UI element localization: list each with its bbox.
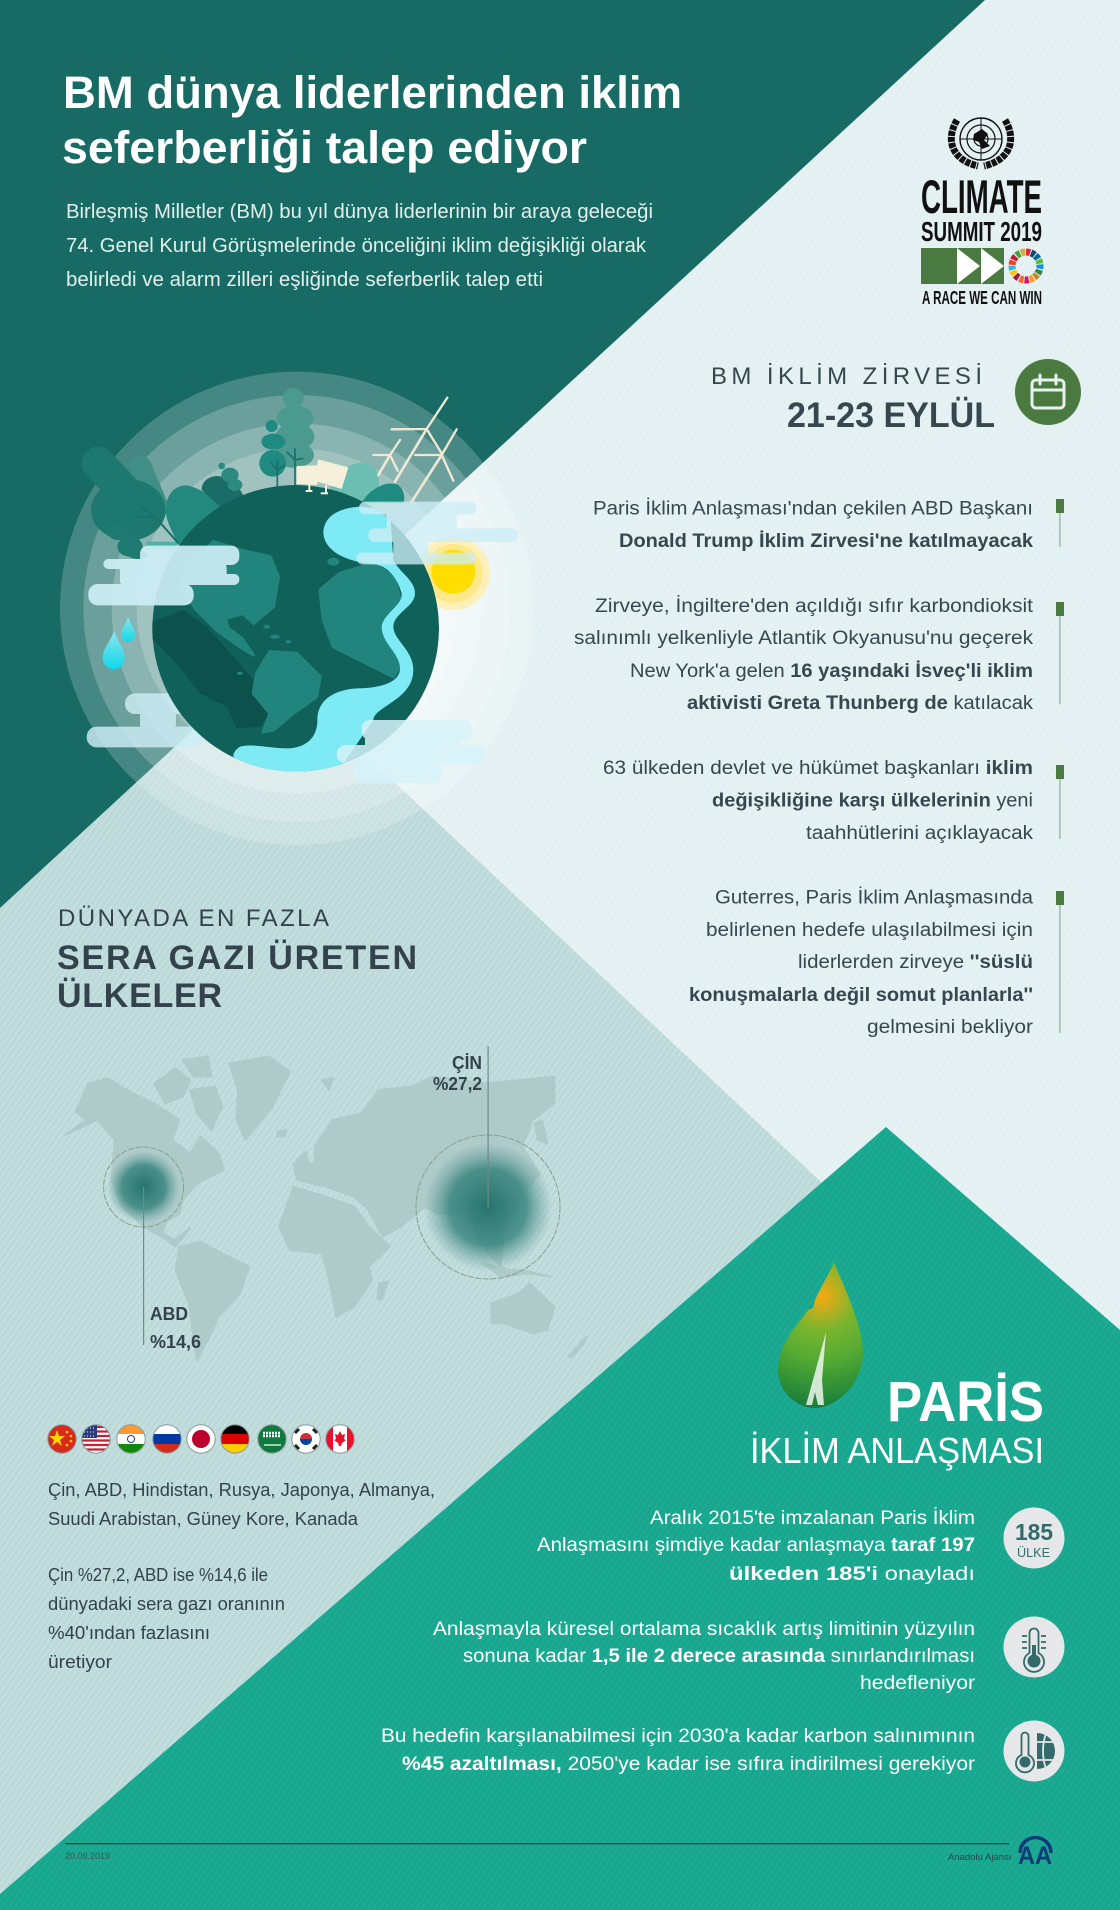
pale right hill (330, 463, 379, 507)
icon: solar panels (297, 459, 348, 494)
bottom right cloud (337, 720, 485, 783)
icon: wind turbines (373, 398, 457, 502)
country list text (48, 1480, 435, 1529)
share text: Çin %27,2, ABD ise %14,6 ile (48, 1565, 268, 1585)
text block: 185 countries (537, 1508, 975, 1585)
heading: date: 21-23 EYLÜL (787, 396, 995, 435)
icon: SDG colour wheel (1006, 246, 1046, 286)
small islands (237, 558, 339, 675)
grey-green map panel (0, 662, 900, 1910)
flag: Russia (152, 1424, 182, 1454)
text block: Guterres: Guterres, Paris İklim Anlaşmasında (715, 888, 1033, 908)
icon: rain drop small (121, 617, 135, 642)
world map (65, 1057, 586, 1360)
text block: temperature limit: hedefleniyor (860, 1673, 976, 1694)
dark ocean shape (152, 610, 268, 728)
heading: greenhouse gas countries: DÜNYADA EN FAZLA (58, 905, 329, 932)
icon: calendar (1015, 359, 1081, 425)
text block: Greta Thunberg: salınımlı yelkenliyle Atlantik Okyanusu'nu geçerek (574, 628, 1034, 649)
text block: temperature limit: Anlaşmayla küresel ortalama sıcaklık artış limitinin yüzyılın (433, 1619, 975, 1640)
title: seferberliği talep ediyor (62, 122, 587, 173)
intro paragraph (66, 201, 653, 291)
text block: Guterres: liderlerden zirveye ''süslü (798, 952, 1033, 973)
text block: Trump (593, 498, 1033, 552)
continent: Africa and Europe (320, 563, 403, 677)
text block: 185 countries: Anlaşmasını şimdiye kadar anlaşmaya taraf 197 (537, 1535, 975, 1556)
title: BM dünya liderlerinden iklim (63, 67, 682, 118)
intro paragraph: belirledi ve alarm zilleri eşliğinde seferberlik talep etti (66, 269, 543, 291)
flag: Japan (187, 1425, 215, 1453)
continent: South America (253, 652, 320, 732)
marker line 2 (1056, 602, 1064, 704)
text block: Guterres: konuşmalarla değil somut planlarla'' (689, 985, 1033, 1006)
hotspot: USA (104, 1147, 184, 1345)
text block: Trump: Paris İklim Anlaşması'ndan çekilen ABD Başkanı (593, 498, 1033, 520)
text block: temperature limit: sonuna kadar 1,5 ile 2 derece arasında sınırlandırılması (463, 1646, 975, 1667)
halo rings (60, 372, 533, 845)
icon: thermometer and globe (1004, 1720, 1064, 1782)
dark hill on horizon (362, 484, 404, 503)
marker line 4 (1056, 891, 1064, 1033)
title (62, 67, 682, 173)
share text (48, 1565, 285, 1672)
large left tree, pale (128, 456, 157, 507)
text block: 63 countries (603, 758, 1034, 844)
heading: greenhouse gas countries: ÜLKELER (57, 977, 222, 1015)
left cloud (88, 546, 239, 605)
icon: thermometer (1004, 1616, 1064, 1678)
footer date: 20.09.2019 (65, 1851, 110, 1861)
hill wedge (147, 542, 180, 550)
icon: 185 ülke: 185 (1015, 1519, 1053, 1545)
text block: Greta Thunberg (574, 596, 1034, 714)
text block: Greta Thunberg: Zirveye, İngiltere'den açıldığı sıfır karbondioksit (595, 596, 1034, 617)
share text: %40'ından fazlasını (48, 1623, 210, 1643)
text block: Guterres: gelmesini bekliyor (867, 1017, 1034, 1038)
top right cloud (357, 502, 518, 564)
label: USA (150, 1304, 201, 1352)
small tree (218, 463, 242, 491)
heading: greenhouse gas countries: SERA GAZI ÜRETEN (57, 939, 417, 977)
flag: South Korea (292, 1425, 320, 1453)
teal Paris panel (0, 1127, 1120, 1910)
logo green bar with arrows (921, 248, 1004, 284)
text block: 63 countries: taahhütlerini açıklayacak (806, 823, 1034, 844)
marker line 3 (1056, 765, 1064, 839)
text block: 185 countries: Aralık 2015'te imzalanan Paris İklim (650, 1508, 975, 1529)
icon: rain drop large (103, 631, 125, 669)
trunks (270, 448, 303, 493)
text block: carbon target: %45 azaltılması, 2050'ye kadar ise sıfıra indirilmesi gerekiyor (402, 1754, 976, 1775)
logo: Climate Summit 2019 (921, 118, 1046, 308)
country list text: Suudi Arabistan, Güney Kore, Kanada (48, 1509, 359, 1529)
country list text: Çin, ABD, Hindistan, Rusya, Japonya, Almanya, (48, 1480, 435, 1500)
flag: Germany (220, 1424, 250, 1454)
share text: dünyadaki sera gazı oranının (48, 1594, 285, 1614)
text block: Greta Thunberg: New York'a gelen 16 yaşındaki İsveç'li iklim (630, 661, 1033, 682)
dark back dome (202, 476, 243, 507)
flag: India (116, 1424, 146, 1454)
tall pale tree (274, 388, 314, 468)
text block: Trump: Donald Trump İklim Zirvesi'ne katılmayacak (619, 531, 1033, 552)
label: China: %27,2 (433, 1074, 482, 1094)
river (233, 507, 415, 775)
dark pine tree (259, 420, 286, 477)
icon: sun (417, 537, 490, 610)
icon: 185 ülke (1004, 1508, 1064, 1568)
text block: 63 countries: değişikliğine karşı ülkelerinin yeni (712, 790, 1033, 812)
intro paragraph: 74. Genel Kurul Görüşmelerinde önceliğini iklim değişikliği olarak (66, 235, 647, 257)
flags row (47, 1424, 355, 1454)
label: USA: %14,6 (150, 1332, 201, 1352)
flag: China (47, 1424, 77, 1454)
text block: 185 countries: ülkeden 185'i onayladı (729, 1564, 975, 1585)
continent: North America (180, 542, 278, 655)
lower left cloud (87, 693, 203, 747)
text block: Greta Thunberg: aktivisti Greta Thunberg de katılacak (687, 693, 1034, 714)
large left tree, dark (91, 463, 166, 541)
share text: üretiyor (48, 1652, 112, 1672)
footer source: Anadolu Ajansı (948, 1852, 1011, 1863)
branch (137, 507, 178, 543)
label: China (433, 1053, 482, 1094)
marker line 1 (1056, 499, 1064, 547)
globe body (140, 485, 439, 775)
flag: Saudi Arabia (258, 1425, 286, 1453)
teal stripe texture (0, 1127, 1120, 1910)
globe illustration (60, 372, 533, 845)
label: China: ÇİN (452, 1053, 482, 1073)
icon: AA logo: AA (1018, 1842, 1052, 1870)
text block: carbon target: Bu hedefin karşılanabilmesi için 2030'a kadar karbon salınımının (381, 1726, 975, 1747)
text block: carbon target (381, 1726, 976, 1775)
small lower-left tree (108, 523, 148, 559)
heading: greenhouse gas countries (57, 905, 417, 1015)
icon: Paris leaf logo (778, 1262, 863, 1408)
text block: 63 countries: 63 ülkeden devlet ve hükümet başkanları iklim (603, 758, 1033, 779)
hotspot: China (416, 1046, 560, 1279)
text block: Guterres: belirlenen hedefe ulaşılabilmesi için (706, 920, 1033, 941)
logo wordmark: SUMMIT 2019: SUMMIT 2019 (921, 216, 1042, 247)
flag: Canada (325, 1424, 355, 1454)
dark green header panel (0, 0, 985, 908)
left dome (166, 485, 222, 545)
label: USA: ABD (150, 1304, 188, 1324)
icon: UN emblem (951, 118, 1011, 166)
flag: USA (81, 1424, 111, 1454)
trees and hills (91, 388, 379, 559)
text block: temperature limit (433, 1619, 976, 1694)
heading: BM İklim Zirvesi: BM İKLİM ZİRVESİ (711, 363, 982, 390)
text block: Guterres (689, 888, 1034, 1038)
footer line (65, 1843, 1009, 1844)
heading: Paris: PARİS (887, 1370, 1044, 1434)
logo tagline: A RACE WE CAN WIN (922, 288, 1042, 308)
heading: İklim Anlaşması: İKLİM ANLAŞMASI (750, 1430, 1044, 1471)
intro paragraph: Birleşmiş Milletler (BM) bu yıl dünya liderlerinin bir araya geleceği (66, 201, 653, 223)
icon: 185 ülke: ÜLKE (1017, 1546, 1050, 1560)
